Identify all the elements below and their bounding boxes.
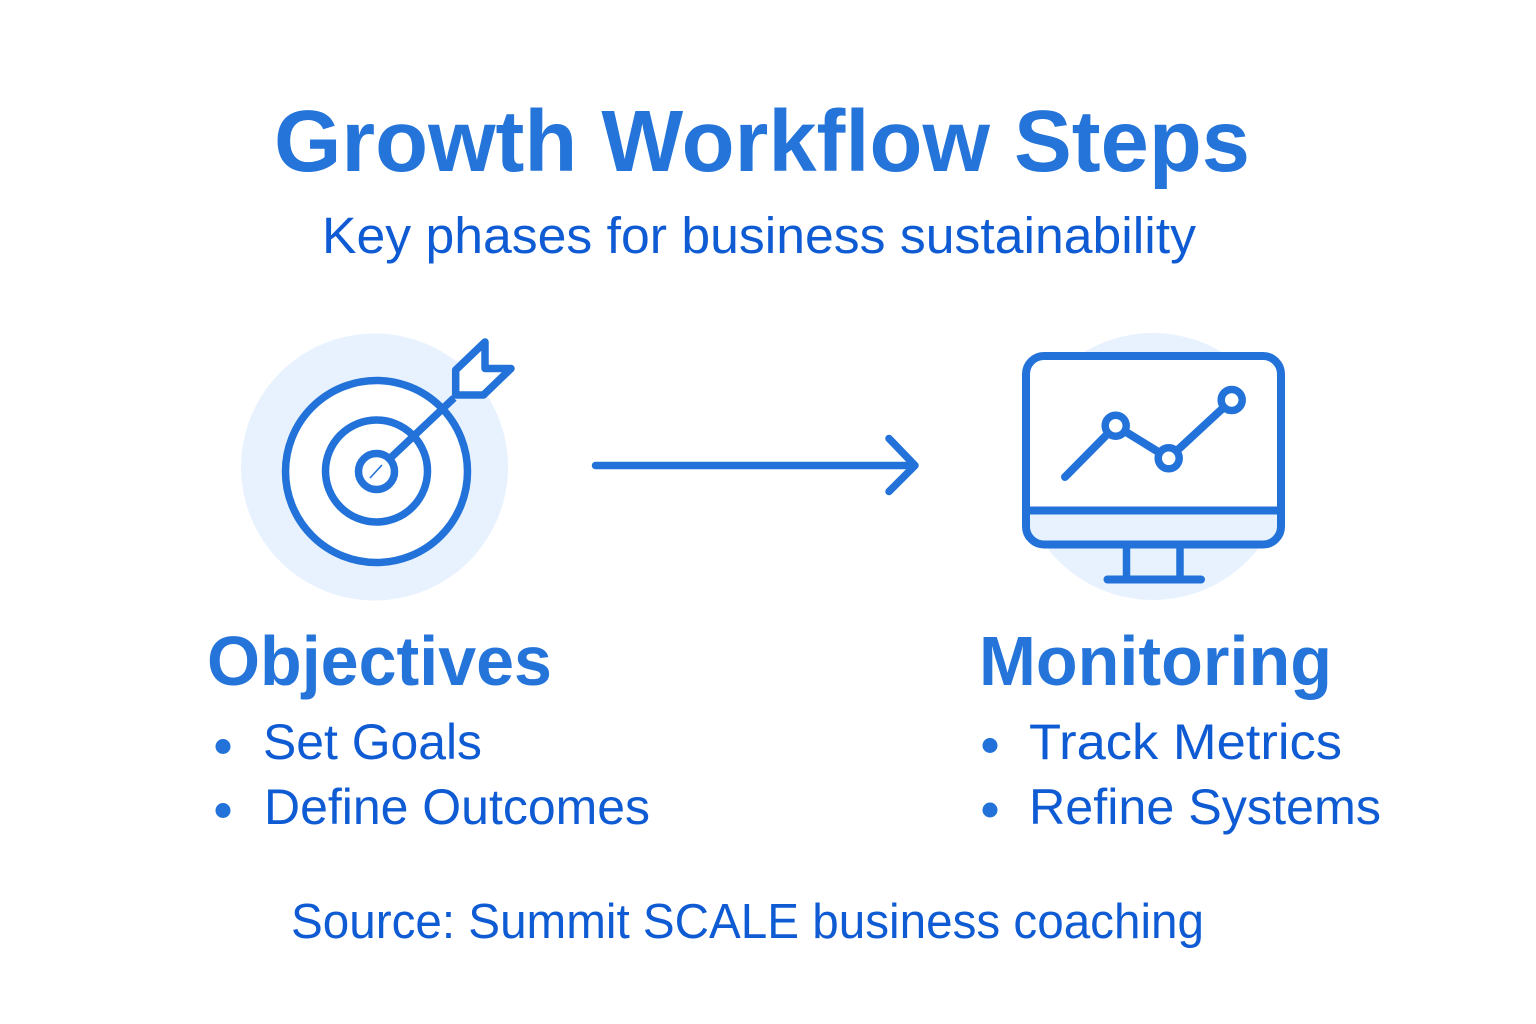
list: objectives: Set Goals [263,714,482,770]
source note: Source: Summit SCALE business coaching [291,895,1204,949]
icon: target with arrow [241,334,511,600]
monitor lower bezel [1026,511,1281,545]
heading: monitoring: Monitoring [979,622,1332,700]
list: monitoring [982,714,1381,835]
title: Growth Workflow Steps [274,93,1250,190]
list: objectives [216,714,650,835]
arrow: objectives to monitoring [596,438,915,492]
list: monitoring: Track Metrics [1029,714,1342,770]
icon: monitor with line chart [1020,333,1286,600]
list: monitoring: Refine Systems [1029,779,1381,835]
subtitle: Key phases for business sustainability [322,207,1197,264]
line chart [1065,400,1232,477]
monitor screen [1026,356,1281,544]
list: objectives: Define Outcomes [264,779,650,835]
heading: objectives: Objectives [207,622,552,700]
monitor stand [1126,545,1180,579]
